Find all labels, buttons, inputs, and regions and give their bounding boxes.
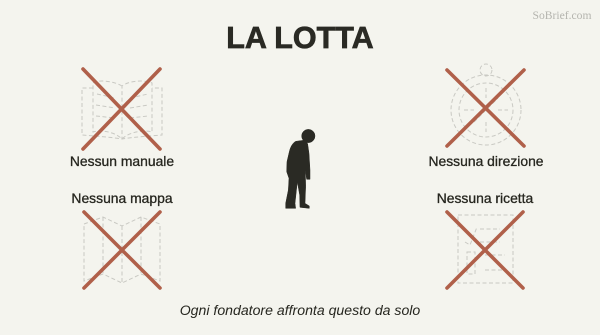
title: LA LOTTA bbox=[226, 21, 374, 55]
icon: crossed-out map bbox=[84, 212, 160, 288]
label: Nessuna mappa: Nessuna mappa bbox=[71, 190, 173, 206]
label: Nessuna ricetta: Nessuna ricetta bbox=[437, 190, 534, 206]
icon: crossed-out recipe bbox=[447, 212, 523, 288]
label: Nessuna direzione: Nessuna direzione bbox=[428, 153, 544, 169]
icon: crossed-out compass bbox=[447, 64, 524, 146]
label: Nessun manuale: Nessun manuale bbox=[70, 153, 174, 169]
watermark: SoBrief.com bbox=[533, 9, 591, 22]
caption: Ogni fondatore affronta questo da solo bbox=[180, 302, 420, 318]
icon: crossed-out book bbox=[82, 69, 162, 149]
figure: slumped person bbox=[286, 129, 315, 208]
